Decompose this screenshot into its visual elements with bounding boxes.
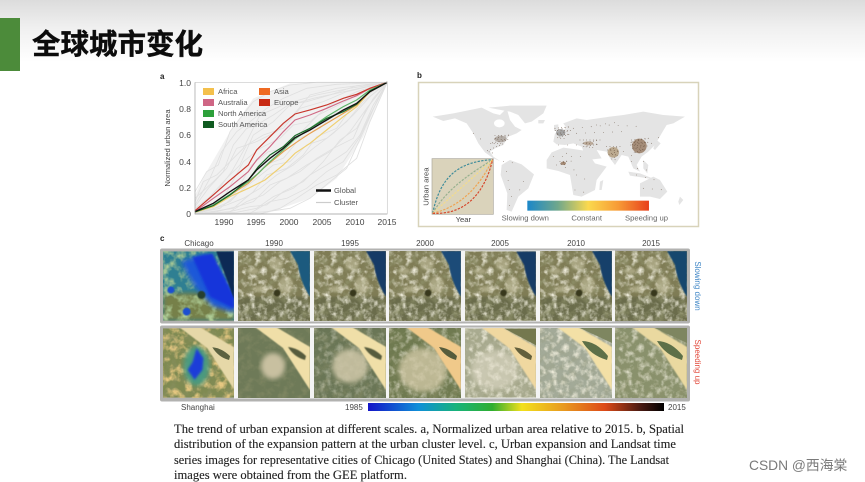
legend: regions: Europe [274,98,298,107]
legend: regions [203,87,298,129]
column headings: 2010 [567,239,585,248]
caption: series images for representative cities of Chicago (United States) and Shanghai (China). The Landsat [174,453,670,467]
inset: urban area growth curves [432,159,493,214]
y axis tick labels: 0.2 [179,183,191,193]
tile: Chicago change map [163,251,234,321]
y axis tick labels: 0 [186,209,191,219]
caption: images were obtained from the GEE platform. [174,468,407,482]
x axis tick labels: 2015 [378,217,397,227]
time scale start label: 1985 [345,403,363,412]
legend: global and cluster [316,186,359,207]
North America line [195,82,387,212]
column headings [184,239,660,248]
map frame [418,82,698,226]
legend: regions: South America [218,120,268,129]
plot lines [195,82,387,214]
cluster haze [195,82,387,214]
tile: Shanghai 2005 [465,328,536,398]
caption [174,422,685,482]
row: Chicago [163,251,687,321]
y axis tick labels: 0.6 [179,130,191,140]
x axis tick labels [215,217,397,227]
tile: Shanghai 2015 [615,328,687,398]
tile: Chicago 2015 [615,251,687,321]
row: Shanghai [163,327,687,398]
title accent bar [0,18,20,71]
inset axis title: year: Year [456,215,472,224]
panel b: world map of expansion patterns [417,71,698,226]
white tile backing [234,250,615,398]
tile: Shanghai 1995 [314,328,386,398]
column headings: 2000 [416,239,434,248]
panel a: normalized urban area line chart [160,72,397,227]
x axis tick labels: 1995 [247,217,266,227]
time colour bar [368,403,664,411]
land masses [433,106,685,212]
title: 全球城市变化 [32,29,203,61]
tile: Chicago 2010 [540,251,612,321]
axes frame [195,82,387,214]
x axis tick labels: 2000 [280,217,299,227]
column headings: Chicago [184,239,214,248]
urban density patches [495,129,647,165]
Global line [195,82,387,212]
city label: Shanghai: Shanghai [181,403,215,412]
inset axis title: urban area: Urban area [421,167,430,206]
legend: regions: Africa [218,87,238,96]
legend: regions: Australia [218,98,248,107]
x axis tick labels: 2005 [313,217,332,227]
row frames [160,248,690,402]
colour scale labels [502,213,668,222]
caption: The trend of urban expansion at different scales. a, Normalized urban area relative to 2015. b, Spatial [174,422,685,436]
row label: speeding up: Speeding up [693,340,702,385]
Europe line [195,82,387,211]
y axis tick labels: 1.0 [179,78,191,88]
colour scale [527,201,649,211]
time scale end label: 2015 [668,403,686,412]
tile: Shanghai change map [163,328,234,398]
column headings: 2005 [491,239,509,248]
legend: regions: North America [218,109,267,118]
y axis title: Normalized urban area [163,109,172,187]
column headings: 2015 [642,239,660,248]
tile: Chicago 1995 [314,251,386,321]
watermark: CSDN @西海棠 [749,458,848,473]
urban dots: scattered [473,122,665,207]
y axis tick labels: 0.8 [179,104,191,114]
caption: distribution of the expansion pattern at the urban cluster level. c, Urban expansion and Landsat time [174,437,676,451]
Asia line [195,82,387,212]
panel letter a: a [160,72,165,81]
legend: global and cluster: Cluster [334,198,359,207]
tile: Shanghai 2010 [540,328,612,398]
y axis tick labels [179,78,191,219]
legend: regions: Asia [274,87,290,96]
column headings: 1990 [265,239,283,248]
x axis tick labels: 2010 [346,217,365,227]
tile: Shanghai 2000 [389,328,461,398]
tile: Chicago 1990 [238,251,310,321]
tile: Shanghai 1990 [238,328,310,398]
legend: global and cluster: Global [334,186,356,195]
cluster lines [195,82,387,214]
tile: Chicago 2005 [465,251,536,321]
Africa line [195,82,387,212]
y axis tick labels: 0.4 [179,157,191,167]
panel c: Landsat time series [160,234,702,412]
column headings: 1995 [341,239,359,248]
panel letter c: c [160,234,165,243]
colour scale labels: Speeding up [625,213,668,222]
colour scale labels: Constant [571,213,603,222]
x axis tick labels: 1990 [215,217,234,227]
South America line [195,82,387,212]
urban dots: dense clusters [487,127,648,165]
panel letter b: b [417,71,422,80]
Australia line [195,82,387,212]
colour scale labels: Slowing down [502,213,549,222]
tile: Chicago 2000 [389,251,461,321]
row label: slowing down: Slowing down [693,261,702,311]
